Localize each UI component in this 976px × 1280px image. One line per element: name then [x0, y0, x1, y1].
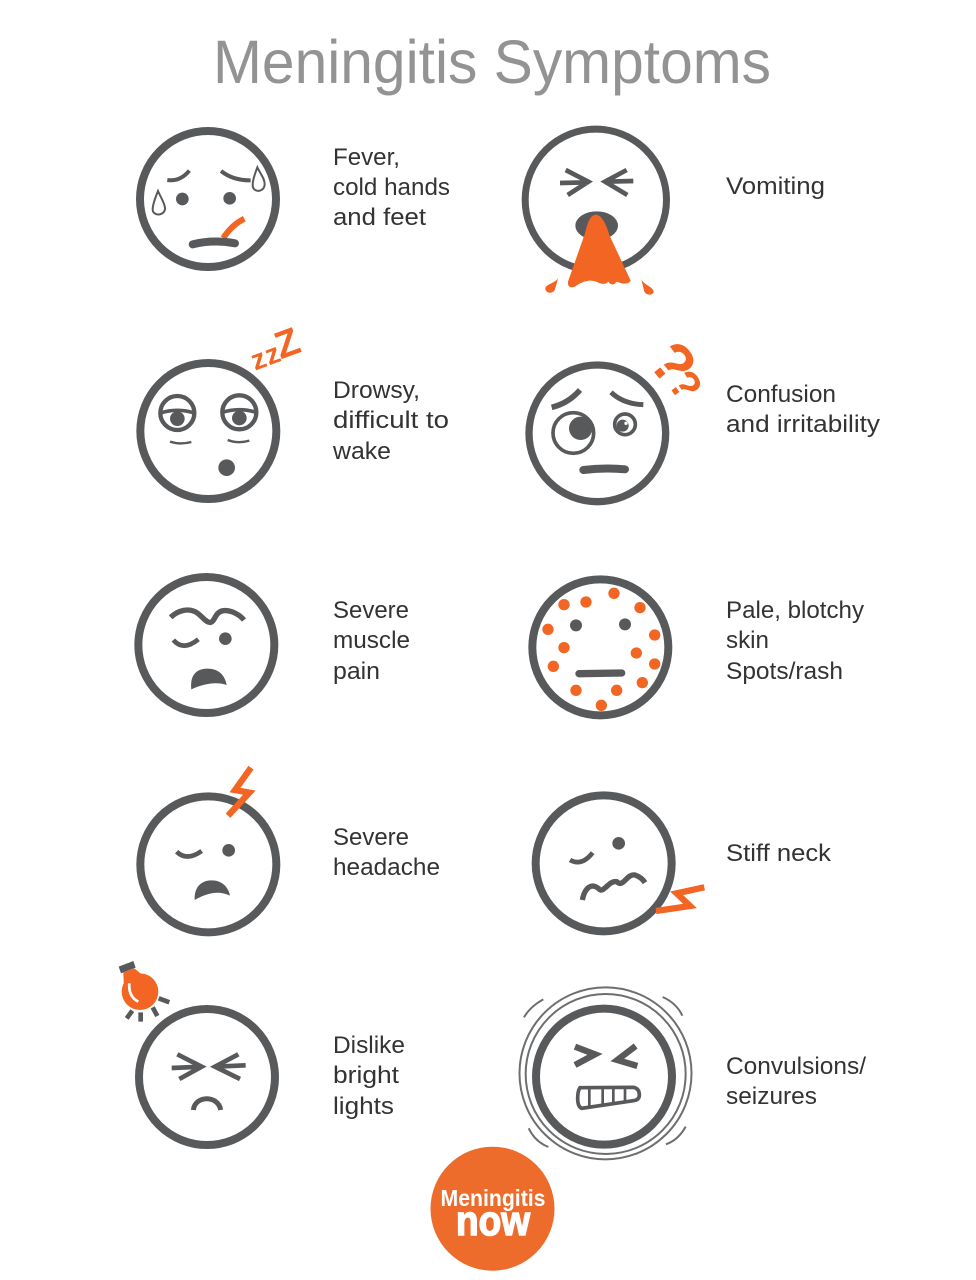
panel: dislike bright lights	[119, 961, 405, 1145]
label: dislike bright lights	[333, 1032, 405, 1120]
logo: Meningitis Now	[430, 1147, 554, 1271]
logo: Meningitis Now: now	[456, 1197, 530, 1244]
label: confusion: and irritability	[726, 411, 881, 438]
label: headache	[333, 824, 440, 881]
icon: drowsy face	[140, 319, 306, 499]
label: stiff neck: Stiff neck	[726, 840, 832, 867]
label: muscle pain: pain	[333, 658, 380, 685]
label: convulsions	[726, 1053, 866, 1110]
icon: confused face	[529, 329, 712, 502]
icon: confused face: ?	[636, 329, 709, 398]
label: fever: cold hands	[333, 174, 450, 201]
panel: fever	[140, 131, 450, 267]
label: fever: Fever,	[333, 144, 400, 171]
label: drowsy: Drowsy,	[333, 377, 420, 404]
label: dislike bright lights: Dislike	[333, 1032, 405, 1059]
panel: stiff neck	[536, 795, 832, 931]
label: dislike bright lights: bright	[333, 1062, 399, 1089]
label: muscle pain	[333, 597, 410, 685]
label: rash: skin	[726, 627, 769, 654]
icon: fever face	[140, 131, 276, 267]
label: rash	[726, 597, 865, 685]
label: drowsy: wake	[332, 438, 391, 465]
label: convulsions: seizures	[726, 1083, 817, 1110]
label: confusion: Confusion	[726, 381, 836, 408]
title: Meningitis Symptoms	[213, 28, 771, 96]
panel: rash	[532, 579, 865, 715]
icon: vomiting face	[525, 129, 666, 295]
label: vomiting: Vomiting	[726, 173, 825, 200]
icon: muscle pain face	[138, 577, 274, 713]
icon: confused face: ?	[659, 361, 712, 409]
icon: drowsy face: Z	[269, 319, 306, 368]
icon: stiff neck face	[536, 795, 704, 931]
label: headache: headache	[333, 854, 440, 881]
icon: drowsy face: z	[260, 337, 285, 372]
panel: vomiting	[525, 129, 825, 295]
panel: muscle pain	[138, 577, 410, 713]
label: muscle pain: muscle	[333, 627, 410, 654]
icon: drowsy face: z	[246, 342, 271, 377]
label: fever: and feet	[333, 204, 426, 231]
icon: blotchy face	[532, 579, 668, 715]
icon: seizure face	[519, 987, 691, 1159]
panel: convulsions	[519, 987, 866, 1159]
icon: headache face	[140, 768, 276, 932]
panel: drowsy	[140, 319, 449, 499]
panel: headache	[140, 768, 440, 932]
panel: confusion	[529, 329, 881, 502]
label: confusion	[726, 381, 881, 438]
label: drowsy	[332, 377, 449, 465]
label: fever	[333, 144, 450, 231]
infographic canvas	[118, 38, 880, 1271]
label: muscle pain: Severe	[333, 597, 409, 624]
logo: Meningitis Now: Meningitis	[440, 1185, 546, 1211]
icon: light-sensitive face	[119, 961, 275, 1145]
label: rash: Pale, blotchy	[726, 597, 865, 624]
label: headache: Severe	[333, 824, 409, 851]
label: convulsions: Convulsions/	[726, 1053, 866, 1080]
label: rash: Spots/rash	[726, 658, 843, 685]
label: drowsy: difficult to	[333, 407, 449, 434]
label: dislike bright lights: lights	[333, 1093, 394, 1120]
